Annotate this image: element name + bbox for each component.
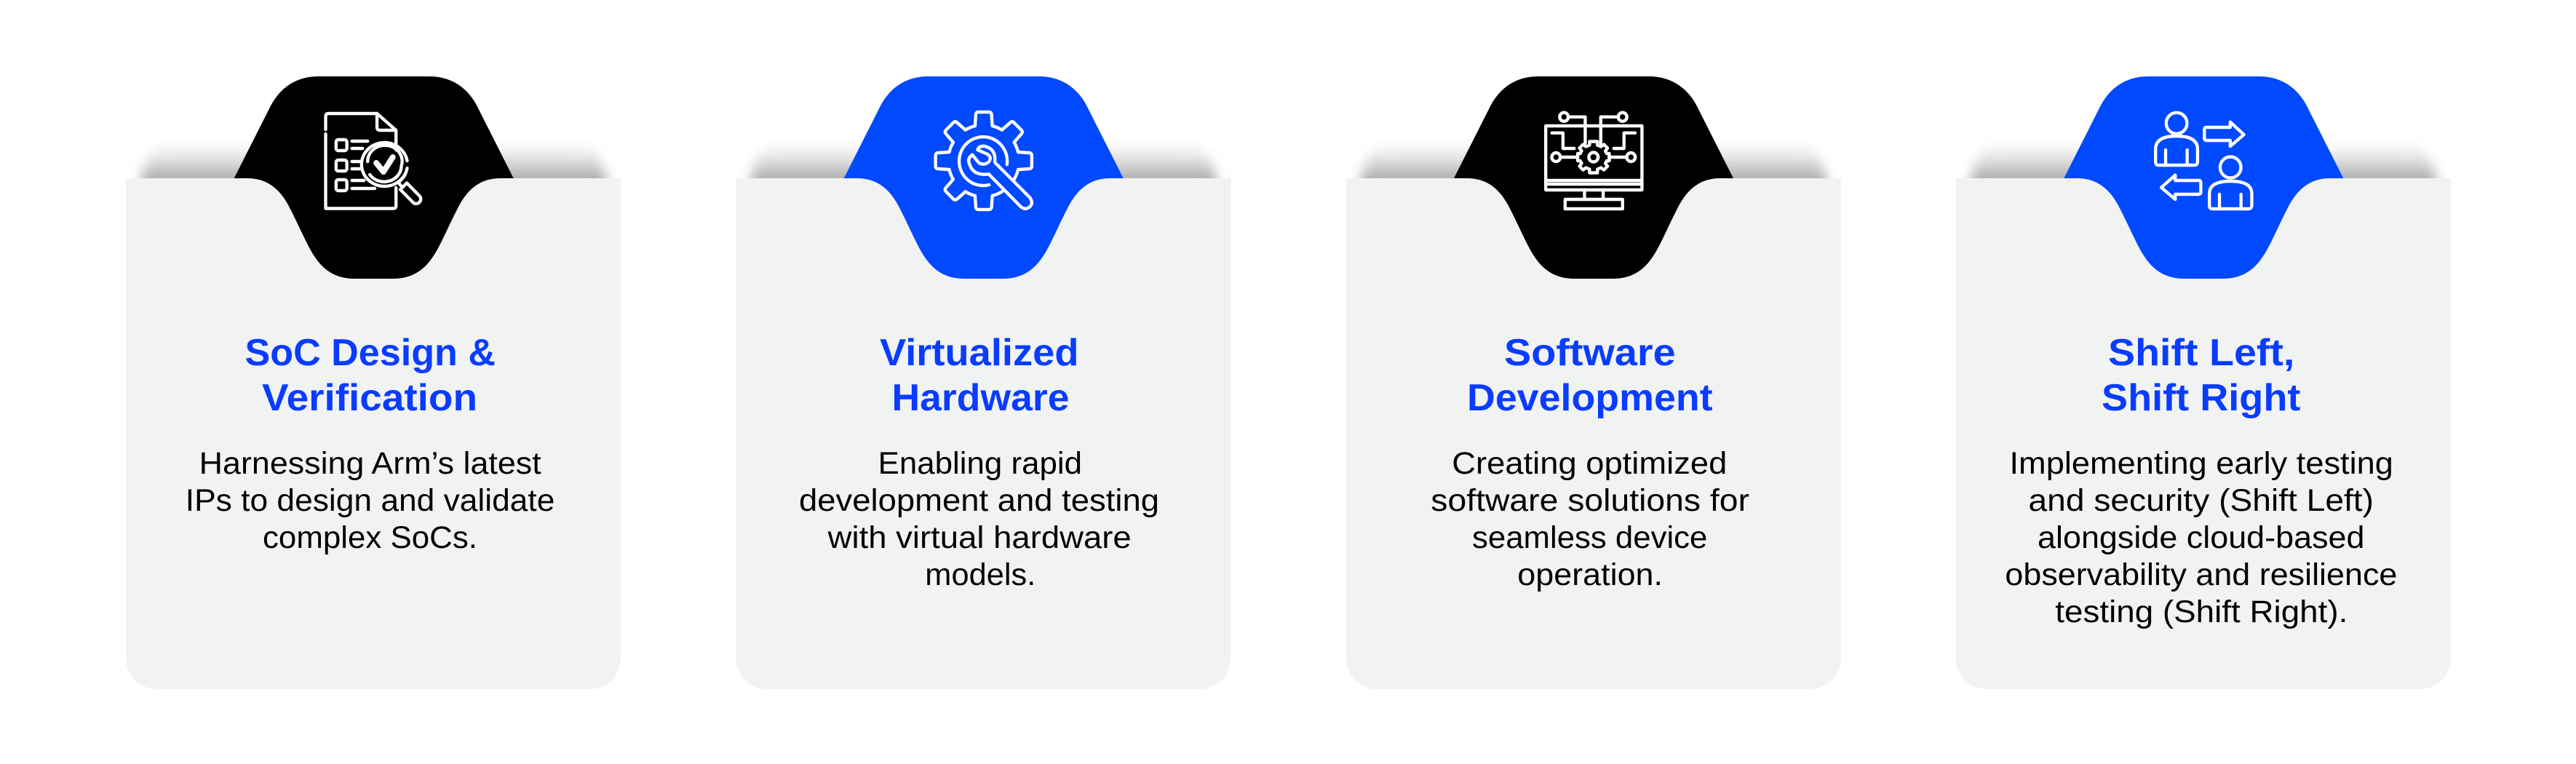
body text xyxy=(2005,446,2397,629)
heading: Software xyxy=(1504,332,1676,374)
icon: checklist document with magnifier xyxy=(326,114,421,208)
heading: SoC Design & xyxy=(245,332,496,374)
tab shadow xyxy=(1361,140,1826,196)
icon: monitor with gear and circuit xyxy=(1546,113,1642,209)
body text: models. xyxy=(925,557,1035,592)
panel: Virtualized Hardware xyxy=(736,76,1231,689)
panel: SoC Design & Verification xyxy=(126,76,621,689)
body text xyxy=(799,446,1159,592)
body text: with virtual hardware xyxy=(827,520,1132,555)
card background xyxy=(126,178,621,689)
tab: black xyxy=(1454,76,1733,279)
heading: Development xyxy=(1467,377,1713,419)
panel: Software Development xyxy=(1346,76,1841,689)
tab shadow xyxy=(141,140,607,196)
card background xyxy=(736,178,1231,689)
heading xyxy=(2102,332,2300,419)
body text: observability and resilience xyxy=(2005,557,2397,592)
body text: development and testing xyxy=(799,483,1159,518)
body text: and security (Shift Left) xyxy=(2029,483,2374,518)
body text: software solutions for xyxy=(1431,483,1749,518)
body text: seamless device xyxy=(1472,520,1707,555)
body text xyxy=(186,446,554,555)
icon: two people exchanging arrows xyxy=(2155,113,2251,209)
icon: gear with wrench xyxy=(936,112,1032,210)
body text: complex SoCs. xyxy=(263,520,477,555)
body text: Implementing early testing xyxy=(2010,446,2393,481)
heading: Verification xyxy=(262,377,477,419)
body text: operation. xyxy=(1517,557,1663,592)
heading: Hardware xyxy=(892,377,1070,419)
body text xyxy=(1431,446,1749,592)
heading xyxy=(245,332,496,419)
body text: Enabling rapid xyxy=(878,446,1082,481)
body text: Harnessing Arm’s latest xyxy=(199,446,541,481)
tab shadow xyxy=(751,140,1217,196)
heading xyxy=(1467,332,1713,419)
heading: Shift Right xyxy=(2102,377,2300,419)
card background xyxy=(1956,178,2451,689)
tab: blue xyxy=(2064,76,2343,279)
tab: blue xyxy=(844,76,1124,279)
panel: Shift Left, Shift Right xyxy=(1956,76,2451,689)
body text: Creating optimized xyxy=(1452,446,1727,481)
body text: alongside cloud-based xyxy=(2038,520,2365,555)
body text: IPs to design and validate xyxy=(186,483,554,518)
heading: Shift Left, xyxy=(2108,332,2294,374)
heading: Virtualized xyxy=(880,332,1078,374)
heading xyxy=(880,332,1078,419)
card background xyxy=(1346,178,1841,689)
body text: testing (Shift Right). xyxy=(2055,594,2348,629)
tab: black xyxy=(234,76,514,279)
tab shadow xyxy=(1971,140,2436,196)
